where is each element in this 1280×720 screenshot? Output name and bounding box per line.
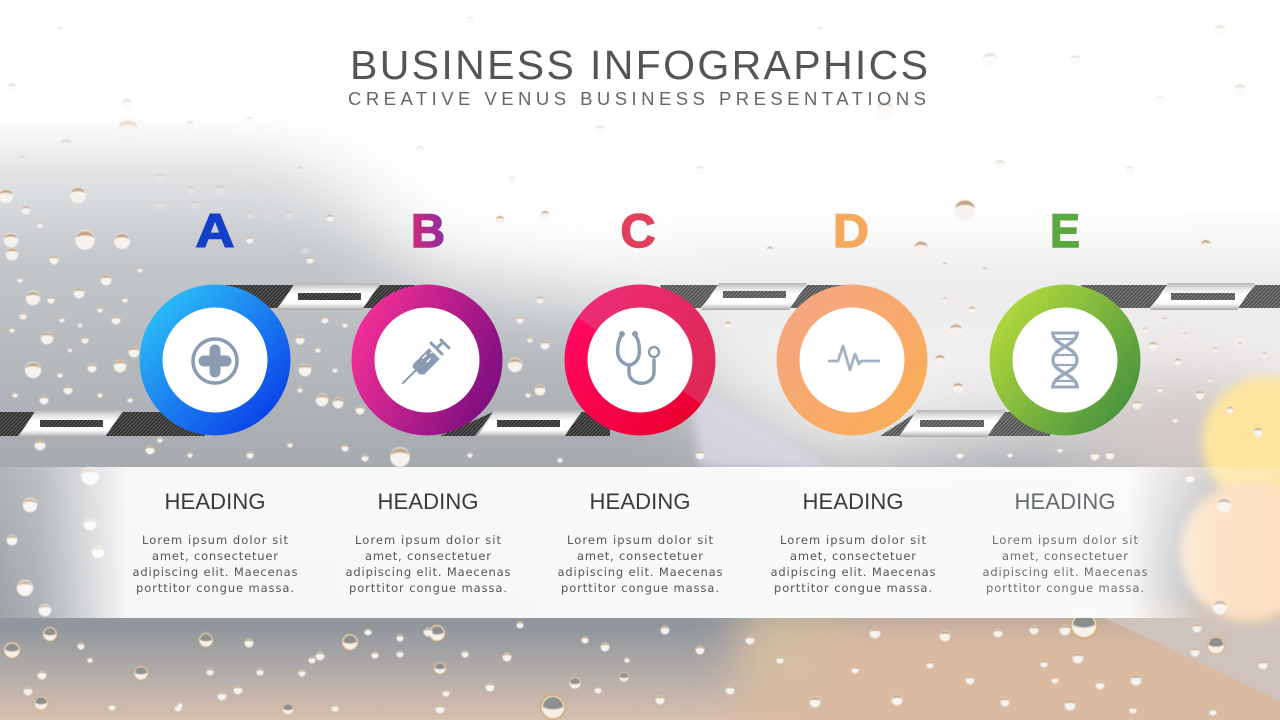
heading E: HEADING [1014,489,1116,514]
ring A [140,284,290,436]
subtitle: CREATIVE VENUS BUSINESS PRESENTATIONS [348,88,926,109]
ring D [776,284,928,436]
body C: amet, consectetuer [577,549,703,563]
connector: A to B [225,283,415,310]
disc C [588,308,692,412]
step E [990,204,1140,436]
connector: left to A [0,410,205,437]
body B: Lorem ipsum dolor sit [355,533,501,547]
step D [776,204,928,436]
connector: E to right edge [1080,283,1280,310]
body E [982,533,1148,595]
body E: amet, consectetuer [1002,549,1128,563]
letter D: D [833,204,869,257]
body A [132,533,298,595]
icon: medical cross [193,339,237,383]
title: BUSINESS INFOGRAPHICS [350,42,928,88]
ring C [564,284,716,436]
body D: amet, consectetuer [790,549,916,563]
heading C: HEADING [590,489,690,514]
body D: adipiscing elit. Maecenas [770,565,936,579]
icon: stethoscope [618,333,659,383]
column D text [770,489,936,595]
body B: amet, consectetuer [365,549,491,563]
heading B: HEADING [378,489,478,514]
body A: porttitor congue massa. [136,581,294,595]
body A: amet, consectetuer [152,549,278,563]
water droplets: faint top area [7,16,1246,255]
body C [558,533,722,595]
column B text [346,489,510,595]
step A [140,204,290,436]
ring C sheen [578,284,716,404]
disc E [1012,308,1118,412]
body A: Lorem ipsum dolor sit [142,533,288,547]
letter B: B [411,204,445,257]
body E: Lorem ipsum dolor sit [992,533,1138,547]
icon: syringe [403,340,449,383]
disc D [800,308,904,412]
heading D: HEADING [802,489,904,514]
connector: B to C [440,410,610,437]
step B [352,204,502,436]
connector: D to E [880,410,1050,437]
body C: adipiscing elit. Maecenas [558,565,722,579]
column E text [982,489,1148,595]
body D [770,533,936,595]
disc A [162,308,268,412]
column A text [132,489,298,595]
disc B [374,308,480,412]
water droplets: bottom band [4,612,1268,719]
body B: porttitor congue massa. [349,581,507,595]
body B [346,533,510,595]
letter E: E [1050,204,1080,257]
body A: adipiscing elit. Maecenas [132,565,298,579]
body D: porttitor congue massa. [774,581,932,595]
column C text [558,489,722,595]
connector: C to D [660,283,845,310]
heading A: HEADING [164,489,266,514]
body D: Lorem ipsum dolor sit [780,533,926,547]
icon: DNA helix [1051,333,1079,387]
letter C: C [620,204,656,257]
ring B [352,284,502,436]
step C [564,213,716,436]
body E: adipiscing elit. Maecenas [982,565,1148,579]
body C: porttitor congue massa. [561,581,719,595]
body B: adipiscing elit. Maecenas [346,565,510,579]
translucent text panel [0,467,1280,618]
water droplets: middle band [0,187,1268,616]
icon: heartbeat [828,346,880,370]
letter A: A [196,204,234,257]
body E: porttitor congue massa. [986,581,1144,595]
body C: Lorem ipsum dolor sit [567,533,713,547]
ring E [990,284,1140,436]
